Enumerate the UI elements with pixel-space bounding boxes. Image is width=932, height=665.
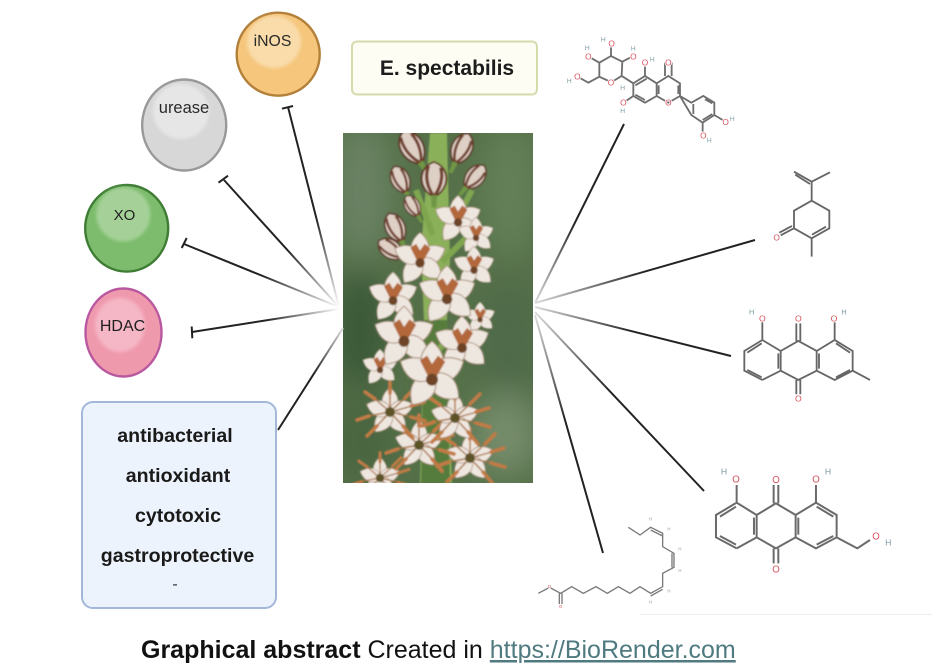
molecule: fatty acid methyl ester: o	[559, 604, 562, 610]
connector: carvone	[535, 240, 755, 303]
molecule: flavone C-glycoside: O	[620, 97, 627, 107]
activity: gastroprotective: gastroprotective	[101, 545, 254, 567]
molecule: flavone C-glycoside: O	[574, 71, 581, 81]
molecule: fatty acid methyl ester: H	[678, 568, 682, 573]
inhibition line: XO	[182, 238, 339, 307]
molecule: flavone C-glycoside: H	[650, 57, 655, 64]
molecule: chrysophanol: H	[841, 307, 847, 316]
molecule: aloe-emodin	[716, 467, 891, 575]
molecule: aloe-emodin: H	[825, 467, 831, 477]
molecule: flavone C-glycoside: H	[601, 36, 606, 43]
enzyme circle: urease: urease	[159, 99, 209, 117]
molecule: flavone C-glycoside: O	[585, 52, 592, 62]
connector: aloe-emodin	[535, 312, 704, 491]
molecule: flavone C-glycoside: H	[620, 85, 625, 92]
molecule: flavone C-glycoside: O	[665, 98, 672, 108]
molecule: aloe-emodin: H	[885, 538, 891, 548]
molecule: flavone C-glycoside: H	[730, 116, 735, 123]
molecule: chrysophanol: O	[795, 394, 802, 404]
molecule: flavone C-glycoside: H	[707, 137, 712, 144]
molecule: fatty acid methyl ester: H	[667, 588, 671, 593]
connector: fatty acid ester	[535, 315, 603, 553]
caption: Graphical abstract Created in https://BioRender.com	[141, 636, 736, 664]
molecule: aloe-emodin: O	[772, 475, 780, 486]
molecule: flavone C-glycoside: O	[722, 117, 729, 127]
molecule: flavone C-glycoside: O	[665, 58, 672, 68]
species title box: E. spectabilis	[380, 57, 514, 80]
activity: antioxidant: antioxidant	[126, 465, 231, 487]
molecule: chrysophanol: H	[749, 307, 754, 316]
dash: -	[172, 576, 178, 593]
molecule: flavone C-glycoside: O	[608, 78, 615, 88]
inhibition line: urease	[218, 176, 339, 307]
enzyme circle: XO	[85, 185, 168, 272]
enzyme circle: XO: XO	[114, 207, 135, 224]
activity: antibacterial: antibacterial	[117, 425, 233, 447]
molecule: fatty acid methyl ester: o	[548, 584, 551, 590]
panel: biological activities	[82, 402, 276, 608]
enzyme circle: HDAC: HDAC	[100, 318, 145, 335]
connector: activities box	[278, 328, 343, 430]
molecule: flavone C-glycoside: H	[631, 46, 636, 53]
molecule: flavone C-glycoside: O	[630, 52, 637, 62]
molecule: aloe-emodin: O	[732, 475, 740, 486]
molecule: flavone C-glycoside: H	[620, 108, 625, 115]
molecule: chrysophanol: O	[831, 313, 838, 323]
molecule: fatty acid methyl ester: H	[649, 516, 652, 521]
inhibition line: iNOS	[282, 106, 339, 307]
molecule: flavone C-glycoside: O	[642, 58, 649, 68]
species title box	[352, 42, 537, 94]
inhibition line: HDAC	[192, 309, 339, 338]
enzyme circle: HDAC	[86, 288, 162, 376]
connector: flavone glycoside	[535, 124, 624, 303]
connector: chrysophanol	[535, 307, 731, 356]
molecule: fatty acid methyl ester	[538, 516, 682, 610]
molecule: flavone C-glycoside: H	[585, 45, 590, 52]
molecule: aloe-emodin: O	[772, 564, 780, 575]
molecule: chrysophanol	[744, 307, 870, 404]
molecule: aloe-emodin: H	[721, 467, 727, 477]
molecule: fatty acid methyl ester: H	[667, 527, 671, 532]
enzyme circle: iNOS: iNOS	[254, 33, 291, 50]
photo: Eremurus flower spike	[343, 133, 533, 483]
molecule: aloe-emodin: O	[872, 531, 880, 542]
enzyme circle: iNOS	[237, 13, 320, 96]
molecule: flavone C-glycoside	[567, 36, 735, 144]
molecule: fatty acid methyl ester: H	[678, 547, 682, 552]
molecule: chrysophanol: O	[795, 313, 802, 323]
molecule: aloe-emodin: O	[812, 475, 820, 486]
molecule: chrysophanol: O	[759, 313, 766, 323]
flower stem	[420, 133, 452, 483]
activity: cytotoxic: cytotoxic	[135, 505, 221, 527]
molecule: flavone C-glycoside: H	[567, 78, 572, 85]
enzyme circle: urease	[142, 80, 226, 170]
molecule: flavone C-glycoside: O	[700, 131, 707, 141]
molecule: flavone C-glycoside: O	[608, 38, 615, 48]
faint image edge line	[640, 614, 932, 615]
molecule: carvone: O	[773, 232, 780, 242]
molecule: fatty acid methyl ester: H	[649, 599, 652, 604]
molecule: carvone	[773, 172, 830, 257]
